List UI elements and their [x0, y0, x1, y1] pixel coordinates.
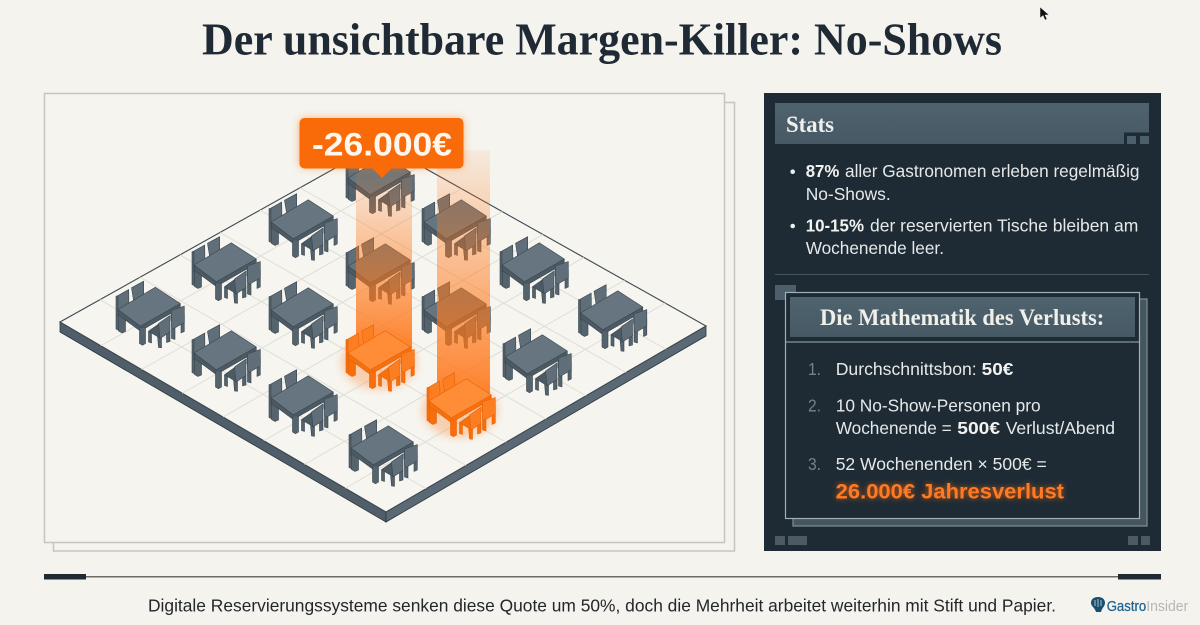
- stats bullet list: aller Gastronomen erleben regelmäßig: [845, 161, 1140, 181]
- panel: loss math: [786, 292, 1147, 526]
- decorative square: [775, 285, 796, 300]
- step 2: Verlust/Abend: [1006, 418, 1115, 438]
- footer rule: [44, 574, 1161, 580]
- step 2: [808, 396, 1115, 438]
- step 3: 52 Wochenenden × 500€ =: [836, 454, 1047, 474]
- title: Der unsichtbare Margen-Killer: No-Shows: [202, 14, 1002, 64]
- footer text: Digitale Reservierungssysteme senken diese Quote um 50%, doch die Mehrheit arbeitet weiterhin mit Stift und Papier.: [148, 596, 1056, 616]
- step 2: 2.: [808, 396, 821, 416]
- step 2: 500€: [957, 418, 1000, 438]
- highlighted empty tables: [341, 325, 498, 439]
- stats heading: [775, 103, 1149, 144]
- logo: GastroInsider: [1091, 597, 1188, 615]
- panel: stats: [764, 93, 1161, 551]
- panel: restaurant floor plan: [44, 94, 734, 551]
- stats heading: Stats: [786, 112, 834, 137]
- logo: GastroInsider: Gastro: [1107, 598, 1146, 615]
- isometric floor: [60, 143, 706, 522]
- step 3: 26.000€ Jahresverlust: [836, 480, 1064, 503]
- step 1: 50€: [982, 359, 1013, 379]
- stats bullet list: 87%: [806, 161, 839, 181]
- stats bullet list: [790, 161, 1140, 258]
- callout: loss amount: -26.000€: [312, 126, 452, 162]
- panel frame: [44, 94, 734, 551]
- step 3: [808, 454, 1064, 503]
- orange light beams: [356, 150, 490, 400]
- icon: logo bulb: [1091, 597, 1105, 612]
- stats bullet list: 10-15%: [806, 216, 864, 236]
- divider: [775, 274, 1149, 275]
- stats bullet list: der reservierten Tische bleiben am: [870, 216, 1138, 236]
- math heading: [790, 297, 1135, 337]
- stats bullet list: Wochenende leer.: [806, 238, 944, 258]
- step 3: 3.: [808, 454, 821, 474]
- step 2: 10 No-Show-Personen pro: [836, 396, 1041, 416]
- step 1: [808, 359, 1013, 379]
- panel footer markers: [775, 536, 1150, 545]
- panel background: [764, 93, 1161, 551]
- step 2: Wochenende =: [836, 418, 952, 438]
- step 1: Durchschnittsbon:: [836, 359, 977, 379]
- step 3: 26.000€ Jahresverlust: [836, 480, 1064, 503]
- logo: GastroInsider: Insider: [1146, 598, 1188, 615]
- tables: grey dining tables: [116, 150, 647, 486]
- callout: loss amount: [299, 118, 464, 178]
- stats bullet list: No-Shows.: [806, 184, 891, 204]
- math heading: Die Mathematik des Verlusts:: [820, 305, 1104, 330]
- step 1: 1.: [808, 359, 821, 379]
- icon: mouse cursor: [1040, 7, 1049, 20]
